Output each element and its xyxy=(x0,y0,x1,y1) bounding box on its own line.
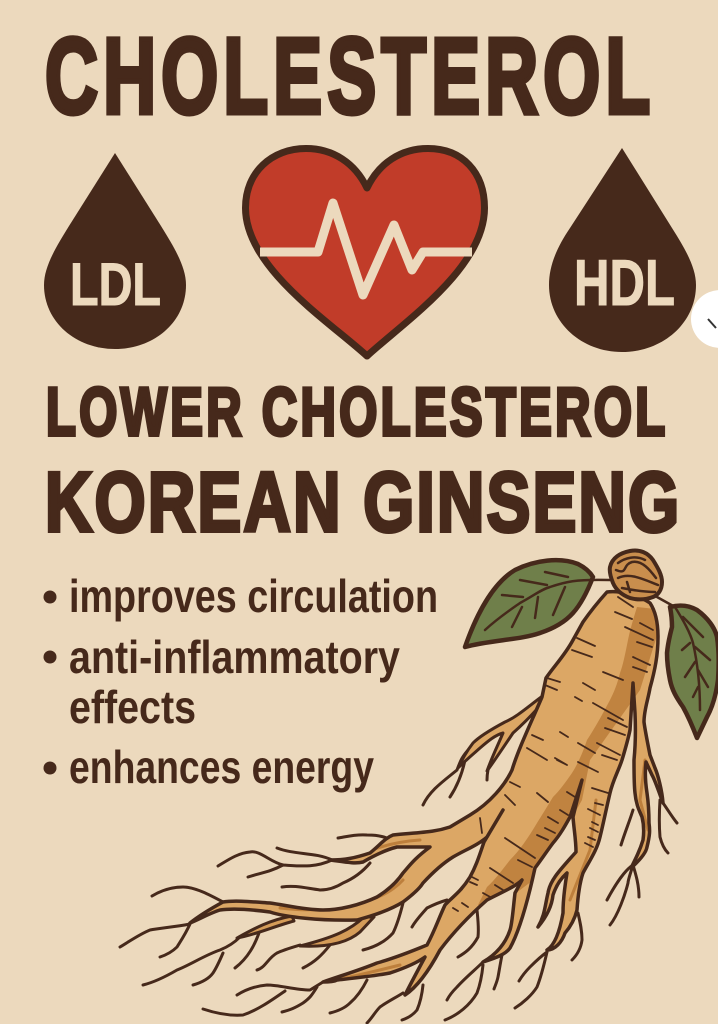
thin rootlets xyxy=(120,748,677,1023)
body shading xyxy=(280,607,665,979)
benefits list: anti-inflammatory xyxy=(69,631,400,683)
benefits list xyxy=(44,570,438,793)
scroll button xyxy=(691,290,718,348)
heading: lower cholesterol: LOWER CHOLESTEROL xyxy=(46,373,665,450)
icon: HDL drop xyxy=(549,148,696,352)
body texture lines xyxy=(453,597,653,911)
main body fill xyxy=(190,592,663,995)
upper left root xyxy=(458,695,544,771)
ginseng crown xyxy=(610,550,662,599)
benefits list: improves circulation xyxy=(69,570,438,622)
heading: korean ginseng: KOREAN GINSENG xyxy=(45,455,679,549)
lower left sub-roots xyxy=(237,916,374,946)
icon: HDL drop: HDL xyxy=(574,246,675,319)
body outline xyxy=(190,592,663,995)
benefits list: effects xyxy=(69,681,196,733)
left leaf xyxy=(465,560,610,647)
icon: heart with pulse xyxy=(246,148,484,356)
illustration: ginseng root xyxy=(120,550,718,1023)
benefits list: enhances energy xyxy=(69,741,374,793)
icon: LDL drop xyxy=(44,153,186,349)
title: CHOLESTEROL xyxy=(45,15,650,136)
icon: LDL drop: LDL xyxy=(70,251,161,318)
right leaf xyxy=(657,597,718,738)
